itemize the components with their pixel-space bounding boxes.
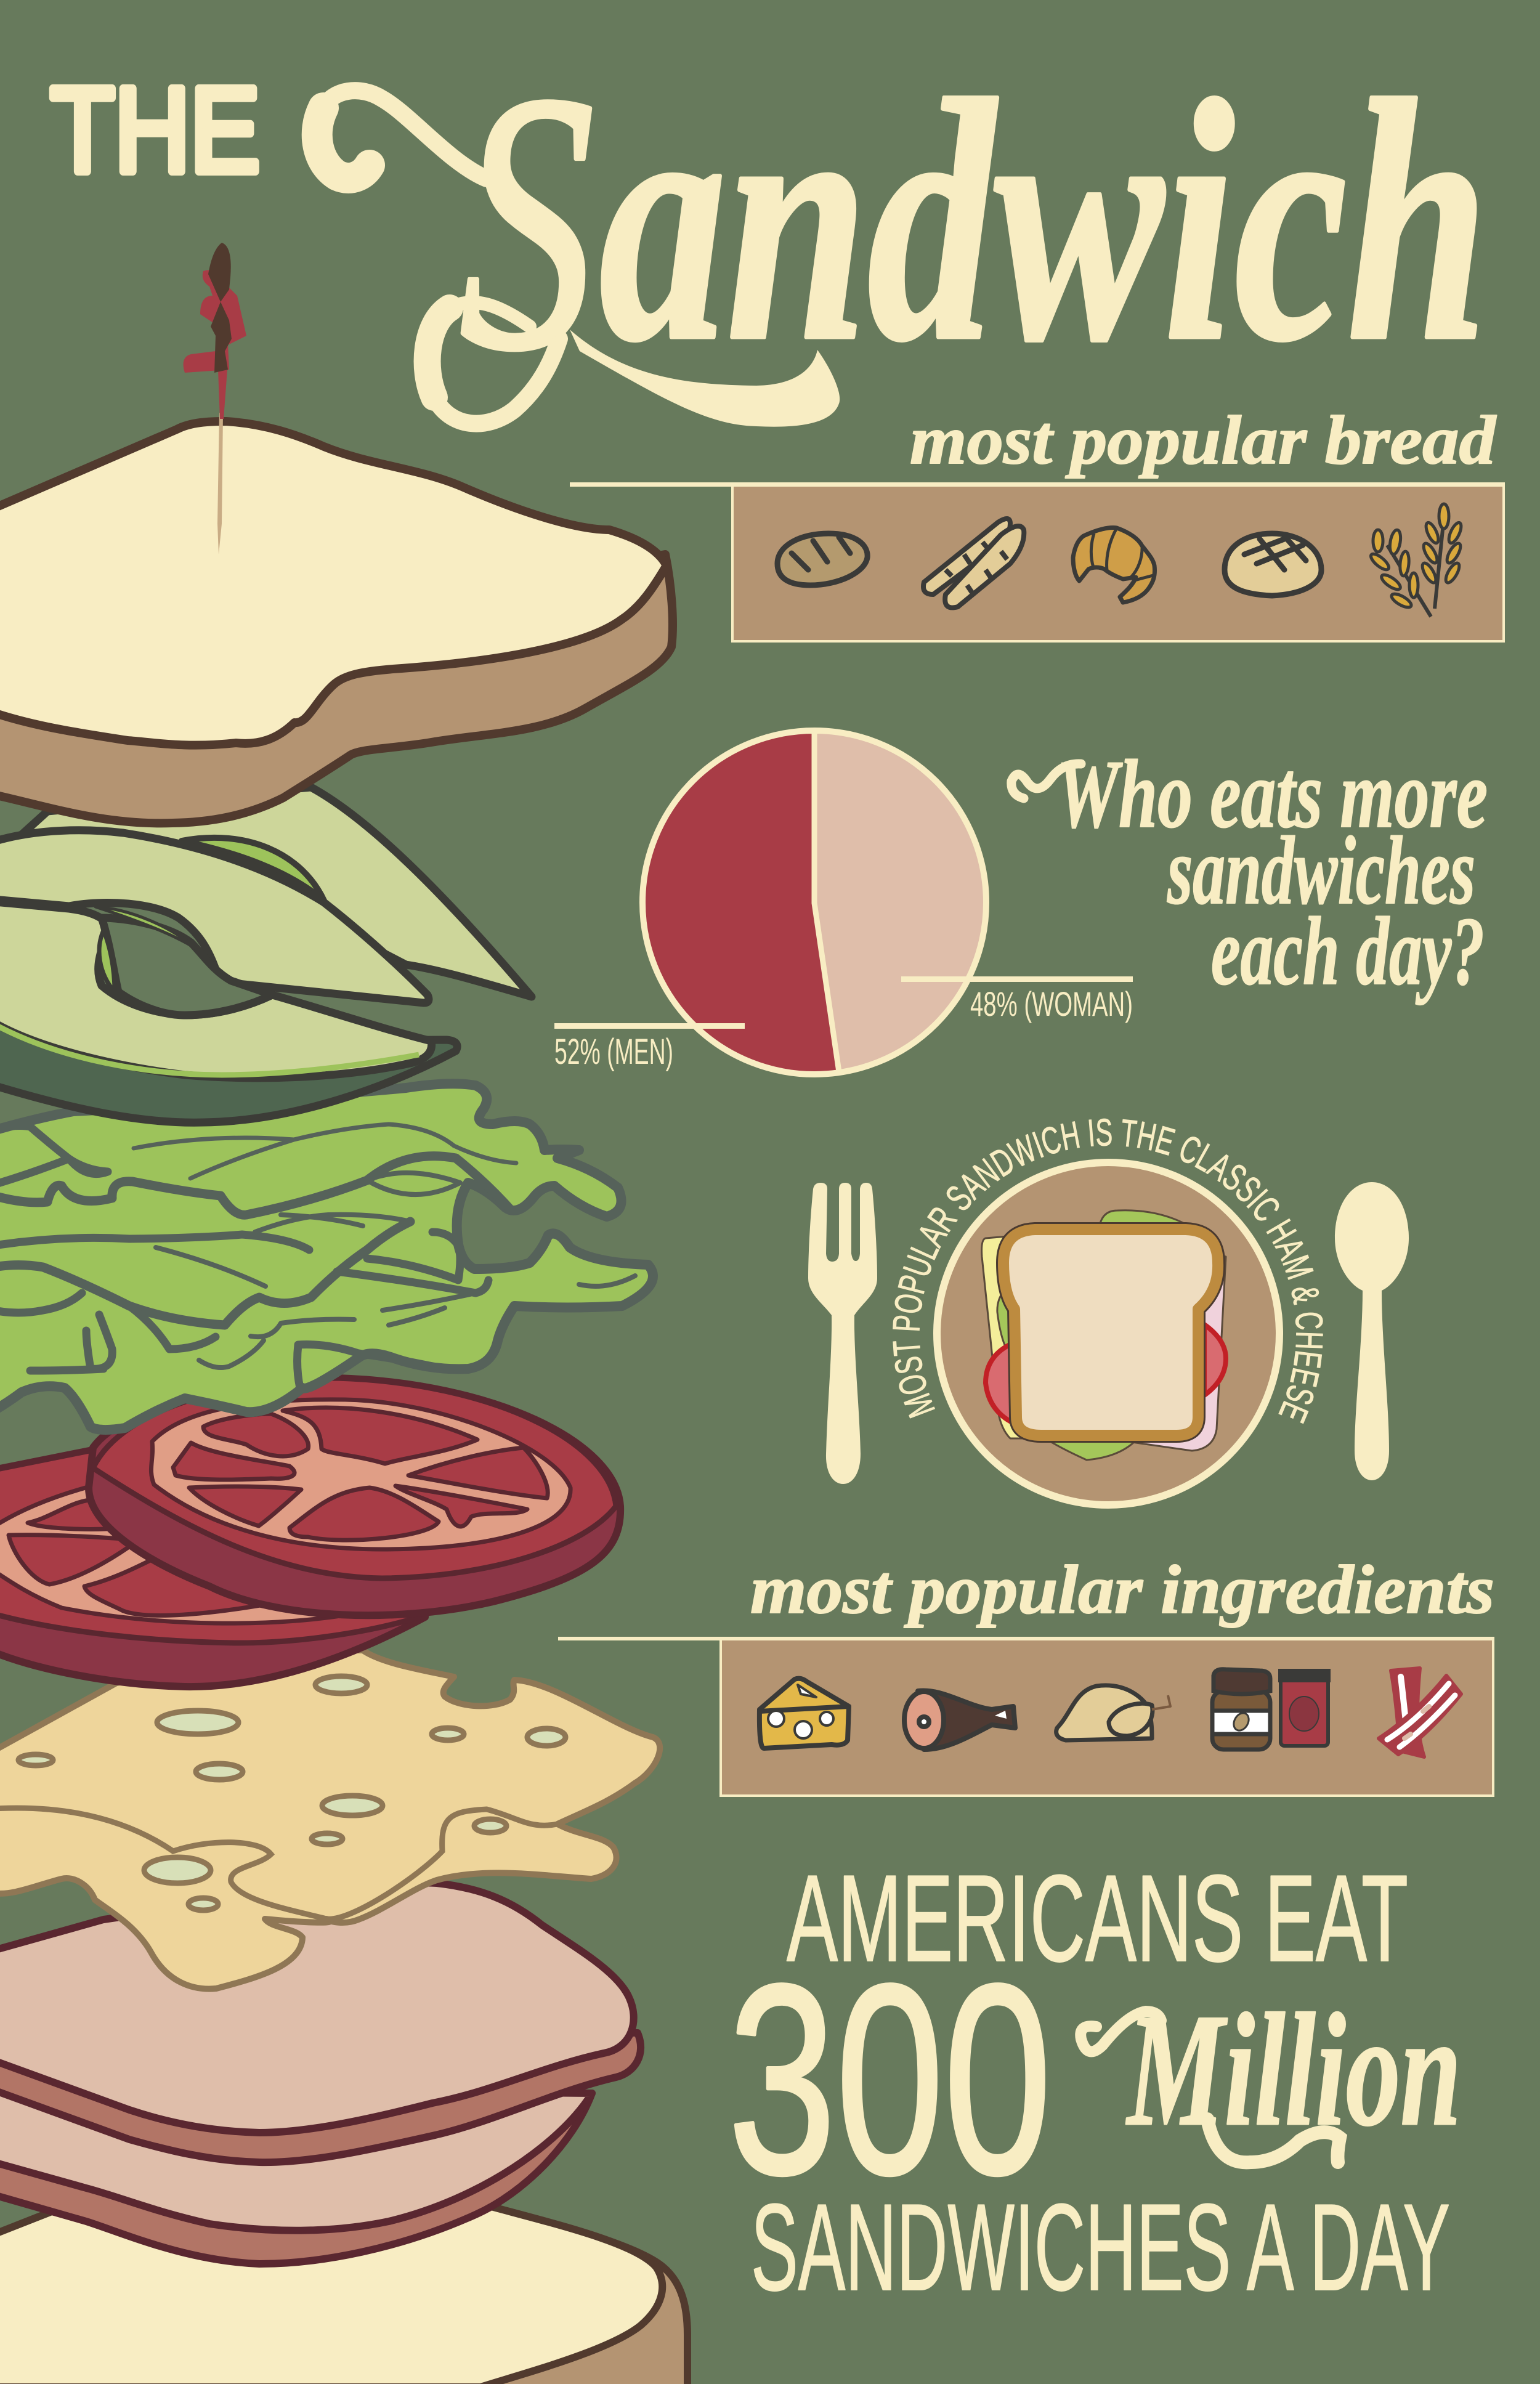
plate illustration: MOST POPULAR SANDWICH IS THE CLASSIC HAM & CHEESE <box>893 1119 1323 1424</box>
heading: most popular ingredients: most popular ingredients <box>750 1552 1494 1628</box>
cheese slice <box>0 1650 660 1989</box>
bottom bread <box>0 2202 687 2384</box>
plate illustration <box>808 1119 1409 1509</box>
pie chart: who eats more <box>554 731 1133 1074</box>
title word: Sandwich: S <box>459 17 595 426</box>
toothpick ribbon <box>184 270 246 373</box>
top bread <box>0 421 673 823</box>
front avocado slice with pit hole <box>0 902 432 1078</box>
bread crust <box>0 554 673 823</box>
icon: crossed bun <box>1225 533 1321 596</box>
lettuce <box>0 1084 653 1430</box>
title <box>51 17 1488 427</box>
section: most popular ingredients <box>558 1552 1494 1796</box>
bread top face <box>0 421 667 745</box>
icon: bacon <box>1379 1668 1461 1757</box>
heading: most popular bread: most popular bread <box>910 402 1497 479</box>
upper ham slice <box>0 1883 641 2162</box>
icon: cheese wedge <box>760 1679 849 1748</box>
label: 52% men: 52% (MEN) <box>554 1032 673 1072</box>
avocado green edges <box>95 907 196 949</box>
curved label: most popular sandwich <box>919 1145 1296 1478</box>
plate <box>937 1162 1279 1505</box>
avocado pit hole <box>102 918 272 1015</box>
cheese holes <box>18 1676 565 1910</box>
icon: jam jar <box>1280 1671 1329 1746</box>
lettuce veins <box>0 1124 635 1388</box>
section: most popular bread <box>570 402 1505 641</box>
lower ham slice <box>0 2088 592 2264</box>
title word: Sandwich: andwich <box>599 30 1488 412</box>
number: 300: 300 <box>728 1928 1052 2230</box>
ham slices <box>0 1883 641 2264</box>
stat: americans eat 300 million sandwiches a day <box>728 1850 1461 2316</box>
title swash: Sandwich flourish <box>317 91 559 424</box>
front tomato slice <box>89 1378 620 1615</box>
middle avocado slice <box>0 830 429 1003</box>
ingredients box <box>721 1639 1493 1796</box>
icon: spoon <box>1335 1182 1409 1480</box>
icon: turkey <box>1056 1685 1170 1740</box>
cheese fold lines <box>0 1808 557 1919</box>
million swash <box>1080 2011 1340 2162</box>
icon: peanut butter jar <box>1212 1669 1270 1749</box>
icon: round loaf <box>777 533 867 585</box>
avocado dark skin <box>0 1025 457 1122</box>
icon: ham leg <box>904 1690 1015 1749</box>
back avocado slice <box>22 787 532 997</box>
title word: THE: THE <box>51 63 260 197</box>
heading: who eats more sandwiches each day <box>1011 740 1488 1005</box>
bread box <box>732 485 1504 641</box>
label: 48% woman: 48% (WOMAN) <box>970 984 1133 1023</box>
back tomato slice <box>0 1449 431 1687</box>
toothpick <box>184 243 246 554</box>
avocado slices <box>0 787 532 1122</box>
icon: fork <box>808 1183 877 1484</box>
plated sandwich <box>982 1210 1226 1460</box>
icon: wheat <box>1369 504 1464 617</box>
pie slice: men 52% <box>642 731 839 1074</box>
icon: baguettes <box>923 519 1024 607</box>
green skin sliver behind <box>182 838 324 901</box>
icon: croissant <box>1073 528 1155 602</box>
